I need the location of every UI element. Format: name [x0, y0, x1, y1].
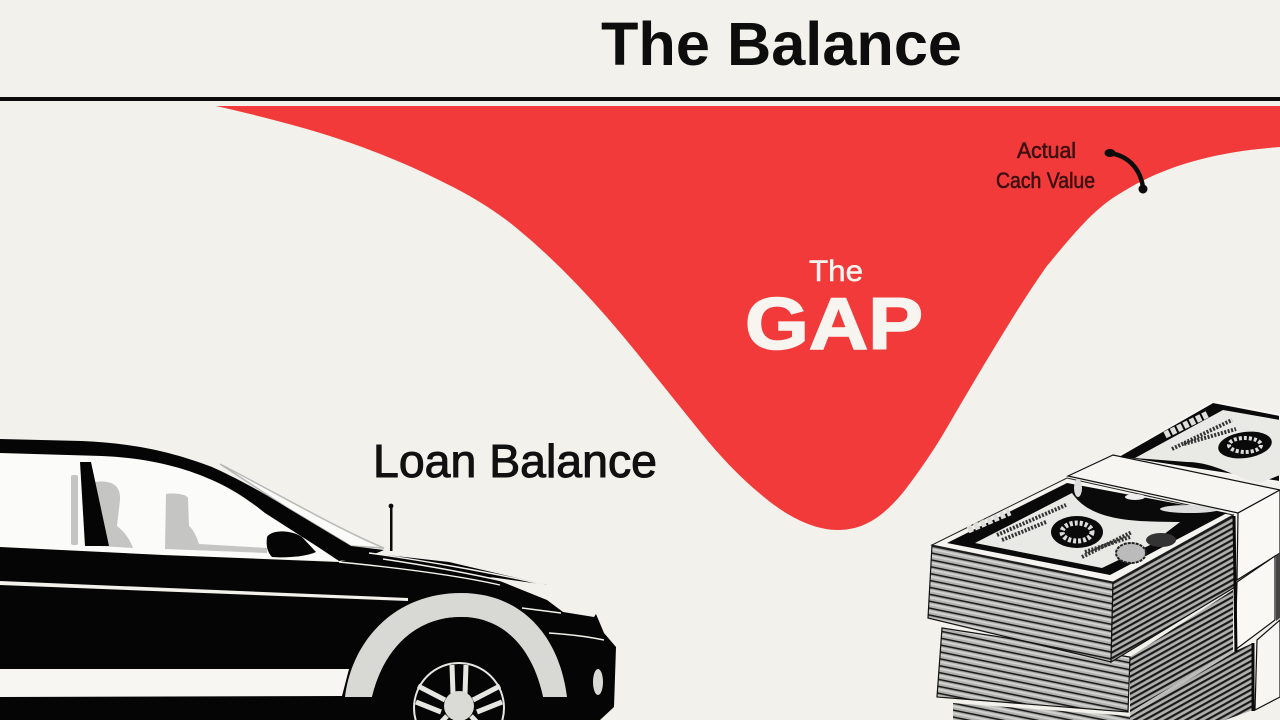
upper paper band — [1068, 455, 1280, 652]
label: actual cash value: Cach Value — [996, 168, 1095, 193]
wing mirror — [267, 531, 316, 557]
car body — [0, 547, 616, 720]
wheel arch — [345, 593, 567, 697]
car windows — [0, 453, 339, 561]
label: actual cash value: Actual — [1017, 138, 1076, 163]
headlight — [593, 669, 603, 695]
antenna — [389, 504, 393, 551]
label: the gap: The — [809, 255, 863, 288]
car illustration — [0, 439, 616, 720]
title: The Balance — [601, 10, 962, 78]
header rule — [0, 97, 1280, 101]
hood highlights — [339, 553, 545, 590]
label: the gap — [745, 255, 923, 365]
label: loan balance: Loan Balance — [373, 435, 657, 487]
stack of cash illustration — [928, 402, 1280, 720]
bumper lines — [522, 608, 604, 640]
passenger silhouettes — [71, 475, 267, 553]
top banknote — [932, 478, 1233, 582]
arrow: actual cash value pointer — [1104, 149, 1148, 194]
arch opening — [372, 617, 543, 720]
wheel — [414, 663, 504, 720]
label: the gap: GAP — [745, 284, 923, 365]
bottom bundle — [953, 643, 1253, 720]
roof — [0, 439, 384, 561]
label: actual cash value — [996, 138, 1095, 193]
body line — [0, 581, 408, 601]
rear top bundle — [1117, 402, 1280, 483]
door pillar — [80, 462, 109, 546]
lower paper band — [1255, 620, 1280, 710]
upper bundle sides — [928, 515, 1235, 662]
windshield glass edge — [220, 464, 384, 548]
middle bundle — [937, 590, 1233, 714]
red gap area between curves — [216, 106, 1280, 530]
sill stripe — [0, 669, 349, 697]
